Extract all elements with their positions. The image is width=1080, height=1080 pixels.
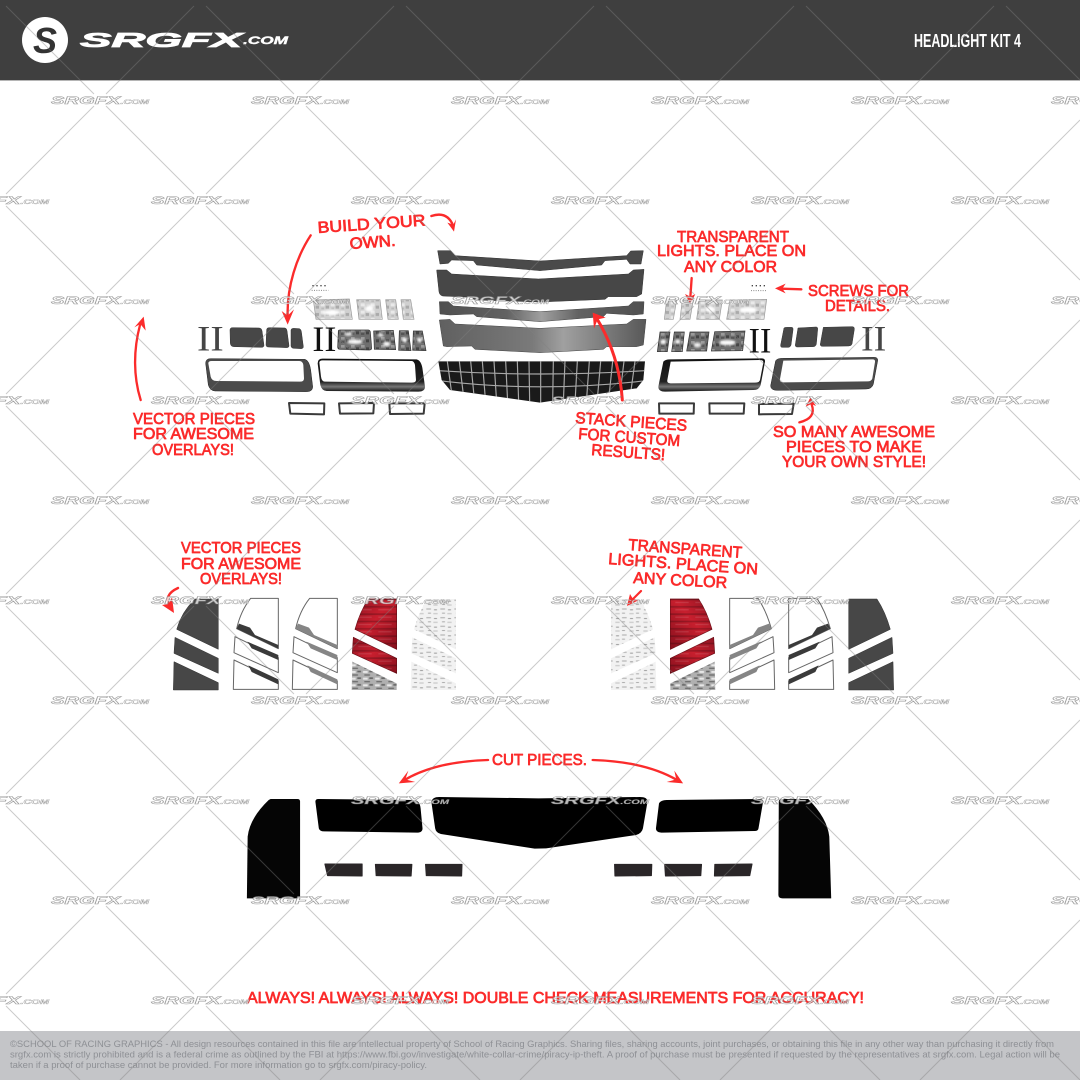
gray vector light pieces — [230, 328, 303, 349]
callout: transparent lights, tail lights: TRANSPARENT — [628, 537, 743, 562]
callout: vector pieces, tail lights: VECTOR PIECES — [181, 540, 301, 557]
left tail light pieces — [173, 598, 456, 690]
black bezel — [658, 358, 765, 392]
gray bezel — [206, 359, 313, 392]
callout: cut pieces: CUT PIECES. — [492, 752, 587, 769]
callout: so many pieces — [773, 398, 935, 471]
callout: transparent lights, tail lights: ANY COLOR — [633, 570, 728, 592]
icon: S logo badge: S — [33, 20, 57, 61]
text: SRGFX .COM — [251, 895, 351, 907]
text: SRGFX .COM — [551, 195, 651, 207]
text: SRGFX .COM — [751, 995, 851, 1007]
callout: build your own — [282, 212, 426, 325]
arrow: to bezel — [799, 398, 816, 422]
text: SRGFX .COM — [451, 295, 551, 307]
grille bar 3, brushed — [439, 302, 644, 322]
callout: vector pieces for overlays, top: VECTOR PIECES — [133, 411, 255, 428]
text: SRGFX .COM — [151, 795, 251, 807]
text: SRGFX .COM — [51, 295, 151, 307]
callout: transparent lights, top: ANY COLOR — [684, 259, 777, 276]
roman-style bars, black: II — [312, 319, 336, 359]
callout: screws — [775, 283, 909, 315]
grille bar 4, brushed — [439, 319, 646, 353]
callout: stack pieces: STACK PIECES — [575, 410, 688, 435]
screws — [312, 286, 328, 290]
callout: so many pieces: YOUR OWN STYLE! — [782, 454, 926, 471]
right tail cut piece — [778, 799, 831, 898]
text: SRGFX .COM — [551, 395, 651, 407]
text: SRGFX .COM — [651, 895, 751, 907]
callout: stack pieces — [575, 313, 688, 464]
callout: vector pieces for overlays, top: FOR AWESOME — [133, 426, 254, 443]
small frames — [659, 403, 794, 414]
legal footer: srgfx.com is strictly prohibited and is a federal crime as outlined by the FBI at https://www.fbi.gov/investigate/white-collar-crime/piracy-ip-theft. A proof of purchase must be presented if requested by the representatives at srgfx.com. Legal action will be — [10, 1050, 1060, 1060]
text: SRGFX .COM — [751, 195, 851, 207]
text: SRGFX .COM — [551, 595, 651, 607]
arrow: to gray tail light — [162, 588, 178, 613]
text: SRGFX .COM — [251, 495, 351, 507]
right headlight pieces — [657, 286, 886, 414]
text: SRGFX .COM — [651, 295, 751, 307]
callout: cut pieces — [399, 752, 683, 783]
transparent lens tail light — [411, 599, 456, 690]
callout: transparent lights, tail lights — [608, 537, 759, 606]
text: SRGFX .COM — [551, 995, 651, 1007]
text: SRGFX .COM — [651, 495, 751, 507]
gray bezel — [771, 357, 878, 390]
text: SRGFX .COM — [851, 95, 951, 107]
arrow: to transparent tail light — [627, 591, 641, 606]
gray vector tail light — [173, 599, 218, 690]
callout: transparent lights, top: TRANSPARENT — [677, 229, 789, 246]
screws — [751, 286, 767, 291]
arrow: upward — [134, 317, 146, 400]
callout: vector pieces, tail lights — [162, 540, 301, 613]
header bar — [0, 0, 1080, 81]
callout: build your own: BUILD YOUR — [317, 212, 426, 237]
text: SRGFX .COM — [651, 95, 751, 107]
red lens tail light — [352, 599, 397, 690]
text: SRGFX .COM — [351, 795, 451, 807]
callout: vector pieces for overlays, top — [133, 317, 255, 459]
center grille stack — [437, 251, 646, 403]
transparent light lenses — [664, 299, 767, 319]
callout: stack pieces: FOR CUSTOM — [578, 426, 681, 450]
logo wordmark: SRGFX — [80, 30, 246, 52]
text: SRGFX .COM — [351, 995, 451, 1007]
text: SRGFX .COM — [751, 795, 851, 807]
arrow: to brushed bar — [593, 313, 622, 400]
grille bar 2 — [437, 269, 644, 302]
callout: so many pieces: SO MANY AWESOME — [773, 424, 935, 441]
logo wordmark: .COM — [243, 35, 289, 47]
text: SRGFX .COM — [151, 395, 251, 407]
outline tail light with dark strips — [789, 598, 834, 689]
left tail cut piece — [247, 799, 300, 898]
text: SRGFX .COM — [951, 795, 1051, 807]
text: SRGFX .COM — [351, 595, 451, 607]
outline tail light with dark strips — [233, 598, 278, 689]
arrow: to grille — [431, 215, 456, 232]
roman-style bars, black: II — [749, 321, 771, 361]
arrow: to left pieces — [282, 235, 311, 325]
text: SRGFX .COM — [151, 995, 251, 1007]
gray vector light pieces — [781, 327, 854, 347]
text: SRGFX .COM — [451, 695, 551, 707]
text: SRGFX .COM — [851, 895, 951, 907]
callout: transparent lights, top — [657, 229, 806, 304]
chrome light lenses — [338, 330, 426, 351]
callout: stack pieces: RESULTS! — [591, 442, 666, 464]
chrome grille — [438, 361, 645, 403]
center grille cut piece — [431, 797, 648, 849]
callout: so many pieces: PIECES TO MAKE — [786, 439, 922, 456]
arrows: to cut pieces — [399, 760, 683, 783]
grille bar 1 — [438, 251, 643, 271]
text: SRGFX .COM — [351, 195, 451, 207]
text: SRGFX .COM — [51, 495, 151, 507]
text: SRGFX .COM — [951, 995, 1051, 1007]
text: SRGFX .COM — [651, 695, 751, 707]
text: SRGFX .COM — [951, 195, 1051, 207]
text: SRGFX .COM — [851, 495, 951, 507]
text: SRGFX .COM — [751, 395, 851, 407]
small frames — [289, 403, 425, 414]
legal footer: ©SCHOOL OF RACING GRAPHICS - All design resources contained in this file are intellectual property of School of Racing Graphics. Sharing files, sharing accounts, joint purchases, or obtaining this file in any other way than purchasing it directly from — [10, 1039, 1054, 1050]
text: SRGFX .COM — [251, 695, 351, 707]
transparent light lenses — [313, 299, 414, 319]
kit title: HEADLIGHT KIT 4 — [914, 31, 1021, 51]
callout: screws: DETAILS. — [825, 298, 890, 315]
roman-style bars, gray: II — [197, 319, 224, 359]
text: SRGFX .COM — [251, 95, 351, 107]
text: SRGFX .COM — [851, 695, 951, 707]
text: SRGFX .COM — [751, 595, 851, 607]
text: SRGFX .COM — [451, 895, 551, 907]
small cut pieces — [325, 864, 752, 876]
right tail light pieces — [611, 598, 894, 690]
left headlight pieces — [197, 286, 426, 414]
icon: S logo badge — [22, 17, 68, 63]
left headlight cut piece — [315, 799, 423, 833]
logo wordmark — [80, 30, 289, 52]
callout: vector pieces, tail lights: FOR AWESOME — [181, 556, 301, 573]
text: SRGFX .COM — [51, 895, 151, 907]
text: SRGFX .COM — [951, 595, 1051, 607]
text: SRGFX .COM — [151, 195, 251, 207]
text: SRGFX .COM — [51, 695, 151, 707]
callout: build your own: OWN. — [349, 233, 396, 253]
outline tail light with gray strips — [292, 598, 337, 689]
roman-style bars, gray: II — [861, 319, 886, 359]
arrow: to lenses — [685, 278, 695, 304]
right headlight cut piece — [656, 799, 763, 833]
red lens tail light — [670, 599, 715, 690]
text: SRGFX .COM — [951, 395, 1051, 407]
text: SRGFX .COM — [451, 495, 551, 507]
transparent lens tail light — [611, 599, 656, 690]
arrow: to screws — [775, 284, 801, 293]
text: SRGFX .COM — [251, 295, 351, 307]
callout: screws: SCREWS FOR — [808, 283, 909, 300]
bottom warning: ALWAYS! ALWAYS! ALWAYS! DOUBLE CHECK MEASUREMENTS FOR ACCURACY! — [247, 990, 864, 1007]
text: SRGFX .COM — [151, 595, 251, 607]
outline tail light with gray strips — [730, 598, 775, 689]
callout: vector pieces, tail lights: OVERLAYS! — [200, 571, 282, 588]
callout: transparent lights, top: LIGHTS. PLACE ON — [657, 243, 806, 260]
text: SRGFX .COM — [451, 95, 551, 107]
legal footer: taken if a proof of purchase cannot be provided. For more information go to srgfx.com/piracy-policy. — [10, 1060, 427, 1071]
callout: transparent lights, tail lights: LIGHTS. PLACE ON — [608, 551, 759, 578]
legal footer — [0, 1031, 1080, 1080]
black cut pieces — [247, 797, 831, 898]
gray vector tail light — [849, 599, 894, 690]
black bezel — [318, 359, 425, 392]
text: SRGFX .COM — [551, 795, 651, 807]
chrome light lenses — [657, 331, 745, 352]
text: SRGFX .COM — [351, 395, 451, 407]
text: SRGFX .COM — [851, 295, 951, 307]
text: SRGFX .COM — [51, 95, 151, 107]
callout: vector pieces for overlays, top: OVERLAYS! — [152, 442, 234, 459]
